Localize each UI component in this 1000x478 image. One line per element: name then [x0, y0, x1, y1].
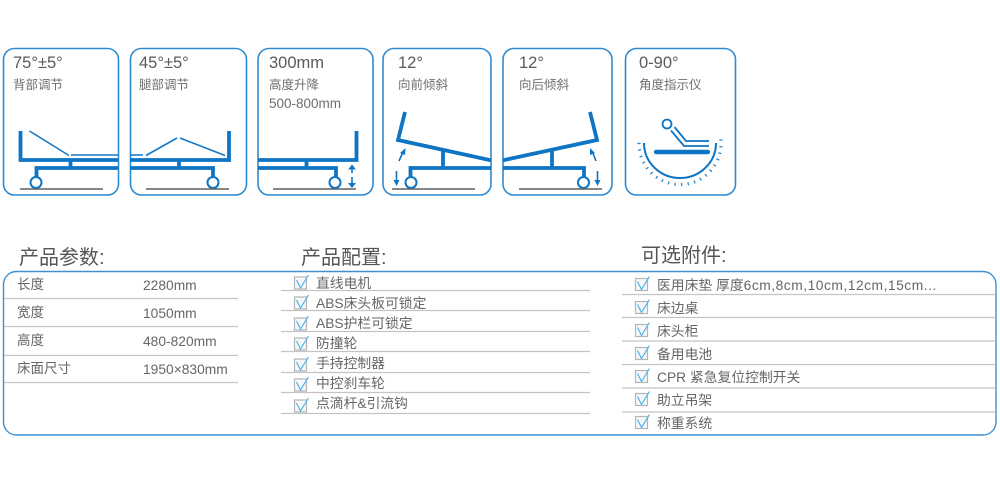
list: product configuration: 点滴杆&引流钩: [316, 395, 408, 411]
icon: bed with raised back: [20, 131, 119, 189]
list: optional accessories: 称重系统: [657, 416, 712, 431]
list: product configuration: ABS护栏可锁定: [316, 316, 413, 331]
list: product configuration: ABS床头板可锁定: [316, 296, 427, 311]
back angle value: 75°±5°: [13, 54, 63, 72]
panel: back adjustment: [4, 48, 119, 195]
list: product configuration: [281, 275, 590, 414]
indicator label: 角度指示仪: [639, 77, 702, 92]
table: product parameters: [4, 277, 238, 382]
back angle label: 背部调节: [13, 77, 63, 92]
list: product configuration: 手持控制器: [316, 356, 385, 371]
heading: product parameters: 产品参数:: [19, 246, 105, 269]
list: optional accessories: CPR 紧急复位控制开关: [657, 369, 801, 385]
panel: specification box: [4, 272, 996, 435]
icon: bed with raised legs: [129, 131, 229, 189]
panel: height adjustment: [257, 48, 373, 195]
height travel value: 300mm: [269, 54, 324, 72]
panel: forward tilt: [383, 48, 492, 195]
forward tilt value: 12°: [398, 54, 423, 72]
panel: backward tilt: [502, 48, 612, 195]
list: optional accessories: 助立吊架: [657, 393, 712, 408]
leg angle value: 45°±5°: [139, 54, 189, 72]
backward tilt value: 12°: [519, 54, 544, 72]
table: product parameters: 床面尺寸: [17, 361, 71, 376]
table: product parameters: 1950×830mm: [143, 362, 228, 377]
icon: bed height lift: [257, 131, 356, 189]
forward tilt label: 向前倾斜: [398, 77, 449, 92]
heading: optional accessories: 可选附件:: [641, 244, 727, 267]
backward tilt label: 向后倾斜: [519, 77, 570, 92]
table: product parameters: 长度: [17, 277, 44, 292]
table: product parameters: 高度: [17, 332, 44, 348]
list: product configuration: 防撞轮: [316, 336, 358, 351]
icon: angle indicator gauge: [639, 120, 721, 185]
panel: leg adjustment: [129, 48, 246, 195]
list: optional accessories: 备用电池: [657, 346, 712, 362]
list: product configuration: 中控刹车轮: [316, 375, 385, 391]
panel: angle indicator: [626, 48, 736, 195]
table: product parameters: 1050mm: [143, 306, 197, 321]
list: optional accessories: 医用床垫 厚度6cm,8cm,10cm,12cm,15cm...: [657, 278, 937, 293]
list: optional accessories: 床头柜: [657, 324, 699, 339]
list: optional accessories: [622, 276, 995, 431]
table: product parameters: 2280mm: [143, 278, 197, 293]
table: product parameters: 宽度: [17, 304, 44, 320]
table: product parameters: 480-820mm: [143, 334, 217, 349]
indicator range value: 0-90°: [639, 54, 679, 72]
list: product configuration: 直线电机: [316, 275, 371, 291]
height label: 高度升降: [269, 77, 320, 92]
heading: product configuration: 产品配置:: [301, 246, 387, 269]
icon: bed tilted forward: [392, 112, 492, 189]
height range: 500-800mm: [269, 96, 341, 111]
leg angle label: 腿部调节: [139, 77, 189, 92]
icon: bed tilted backward: [502, 112, 602, 189]
list: optional accessories: 床边桌: [657, 301, 699, 316]
